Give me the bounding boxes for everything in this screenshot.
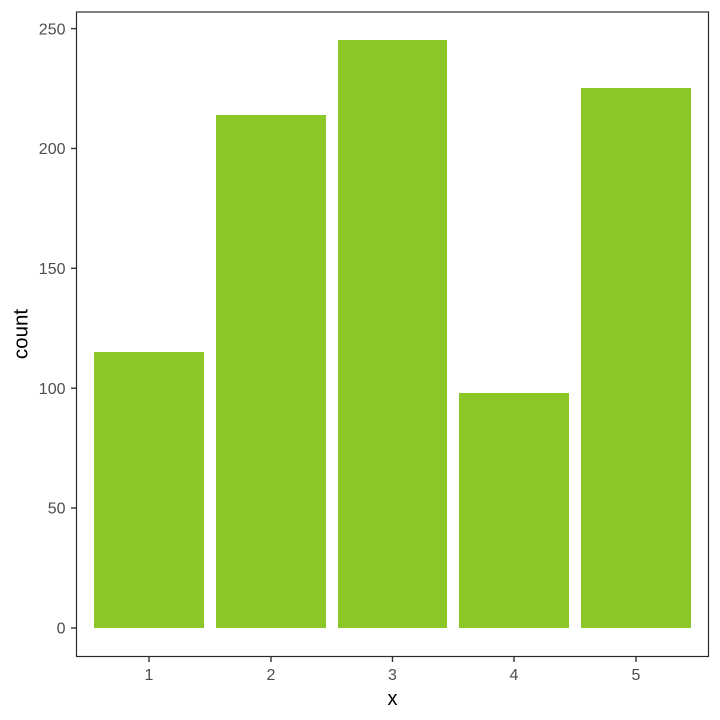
bar: x=5 count 225 [581,88,691,628]
x axis ticks [149,657,636,662]
x axis title: x [388,688,398,710]
x axis tick labels: 3 [388,667,397,684]
x axis tick labels: 1 [145,667,154,684]
y axis tick labels: 50 [48,501,66,518]
bar: x=2 count 214 [216,115,326,628]
y axis tick labels: 0 [57,621,66,638]
plot border [76,12,708,656]
bars [94,40,691,628]
y axis tick labels: 100 [39,381,66,398]
bar: x=4 count 98 [459,393,569,628]
y axis title: count [10,309,32,359]
y axis tick labels [39,21,66,638]
x axis tick labels: 4 [510,667,519,684]
bar: x=1 count 115 [94,352,204,628]
x axis tick labels [145,667,641,684]
bar: x=3 count 245 [338,40,447,628]
y axis ticks [71,29,76,628]
y axis tick labels: 250 [39,21,66,38]
y axis tick labels: 200 [39,141,66,158]
x axis tick labels: 2 [267,667,276,684]
x axis tick labels: 5 [632,667,641,684]
y axis tick labels: 150 [39,261,66,278]
